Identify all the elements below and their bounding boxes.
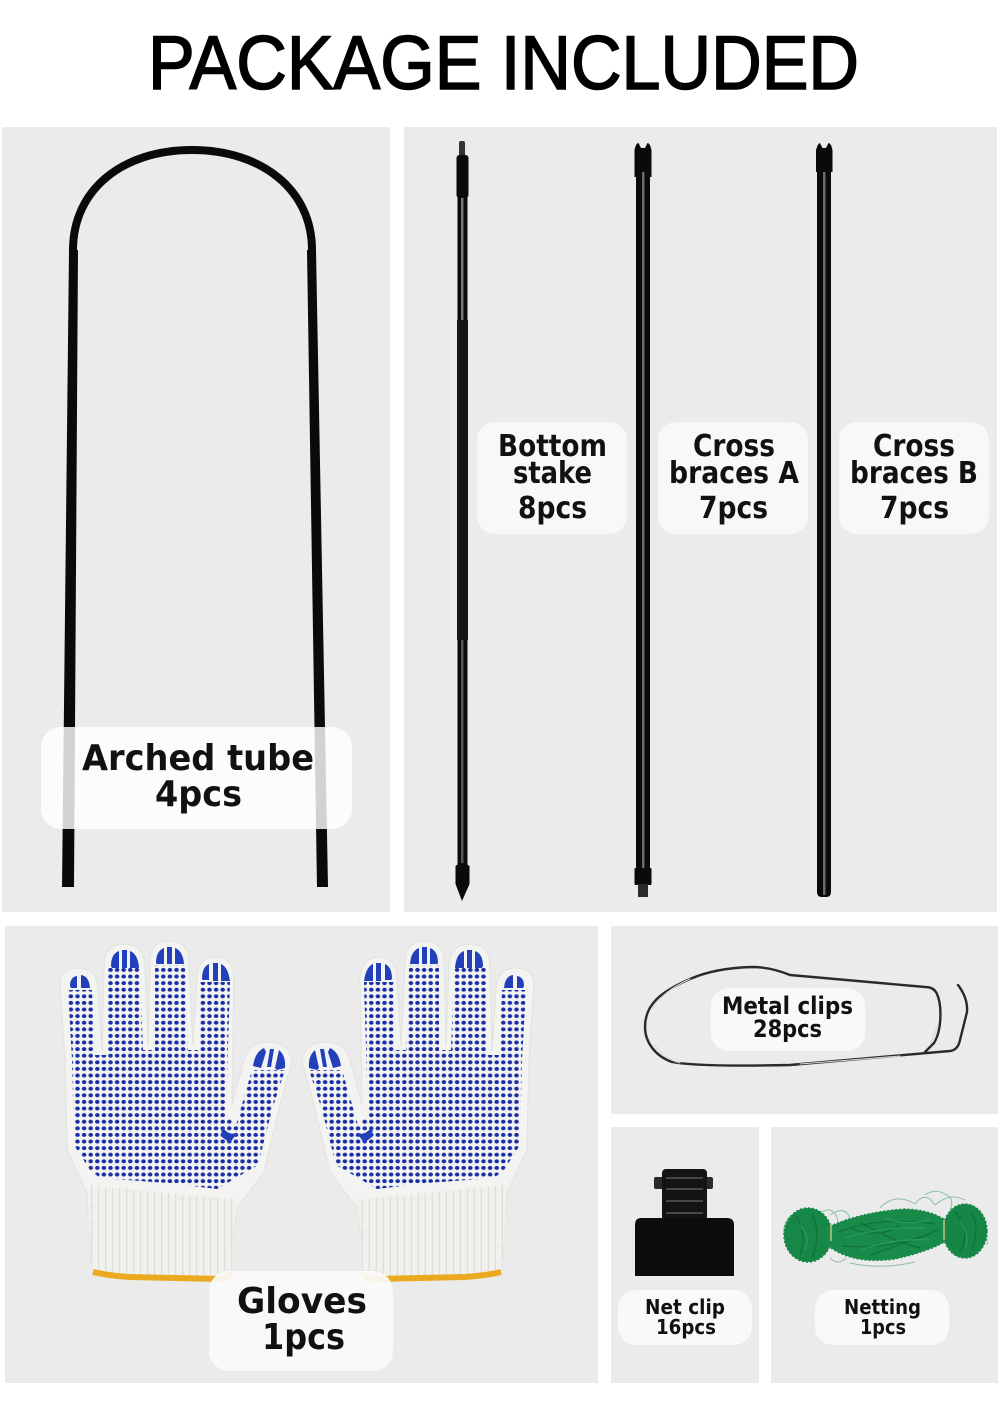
label: bottom stake [477,422,627,534]
panel: netting [771,1127,998,1383]
panel: gloves [5,926,598,1383]
label: netting: Netting [844,1295,921,1319]
label: bottom stake: 8pcs [518,491,587,526]
label: cross braces A: braces A [669,456,800,491]
icon: right glove [284,930,554,1279]
icon: netting bundle [784,1191,987,1266]
label: net clip: 16pcs [656,1315,716,1339]
icon: net clip [635,1169,734,1276]
icon: arched tube [62,150,328,887]
title: PACKAGE INCLUDED [148,21,859,106]
label: bottom stake: Bottom [498,429,607,464]
icon: cross brace A [634,143,652,897]
label: cross braces B [839,422,989,534]
label: arched tube: 4pcs [155,774,242,815]
label: gloves: Gloves [237,1281,367,1322]
label: cross braces B: 7pcs [880,491,949,526]
label: net clip [618,1290,752,1345]
label: arched tube: Arched tube [82,738,314,779]
panel: metal clips [611,926,998,1114]
panel: arched tube [2,127,390,912]
panel: net clip [611,1127,759,1383]
label: cross braces A: Cross [693,429,775,464]
label: cross braces A: 7pcs [699,491,768,526]
label: metal clips: Metal clips [722,992,853,1020]
icon: metal clip [645,967,967,1066]
label: netting [815,1290,949,1345]
label: netting: 1pcs [860,1315,906,1339]
icon: left glove [40,930,310,1279]
label: bottom stake: stake [513,456,592,491]
icon: bottom stake [456,141,470,901]
label: metal clips [711,988,865,1051]
label: gloves [209,1271,393,1371]
label: net clip: Net clip [645,1295,725,1319]
panel: stakes and braces [404,127,997,912]
label: metal clips: 28pcs [753,1015,822,1043]
label: arched tube [41,727,352,829]
label: cross braces B: braces B [850,456,978,491]
label: gloves: 1pcs [262,1317,345,1358]
label: cross braces A [658,422,808,534]
icon: cross brace B [816,143,832,897]
label: cross braces B: Cross [873,429,955,464]
